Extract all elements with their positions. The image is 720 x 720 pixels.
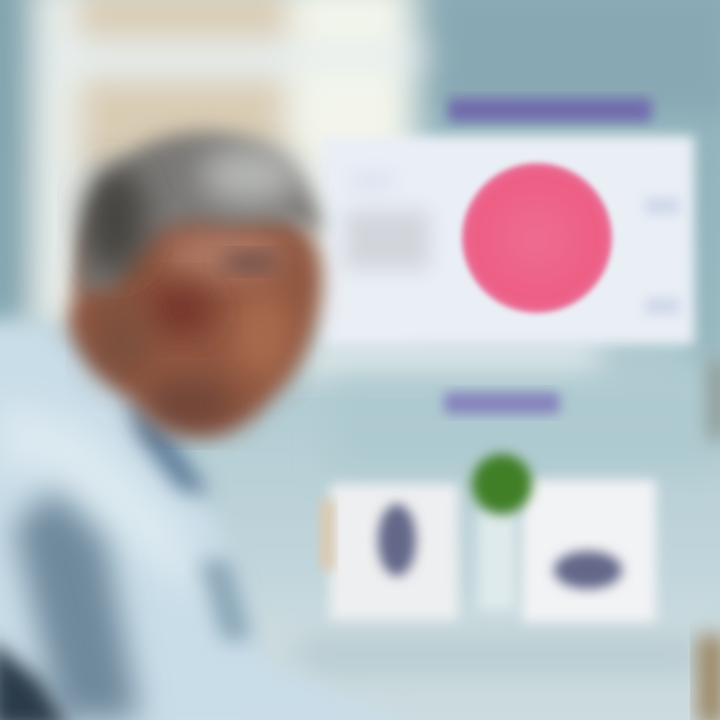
lower cards: [320, 454, 656, 622]
shirt shading: [0, 490, 252, 720]
hair dark side: [83, 165, 147, 275]
board panel: [322, 136, 694, 344]
vase: [478, 510, 516, 610]
window: [0, 0, 720, 360]
right card: [522, 480, 656, 622]
card figure: [378, 504, 416, 576]
card accent: [320, 500, 334, 570]
hair highlight: [200, 145, 300, 205]
collar: [125, 395, 210, 495]
lower wall and table: [250, 380, 720, 720]
neck and face: [68, 190, 322, 434]
second purple heading: [444, 392, 560, 414]
card icon: [554, 551, 622, 589]
pink circle: [462, 163, 612, 313]
shirt highlight: [0, 400, 200, 600]
infographic board: [322, 136, 694, 344]
hair: [78, 132, 322, 290]
shirt: [0, 322, 430, 720]
face highlights: [90, 230, 292, 430]
right edge object: [698, 360, 720, 720]
haze below board: [300, 335, 600, 380]
man: [0, 132, 430, 720]
left text block: [345, 175, 430, 270]
right labels: [645, 198, 680, 314]
left card: [330, 484, 458, 620]
purple heading bar: [448, 98, 652, 122]
green plant: [472, 454, 532, 514]
